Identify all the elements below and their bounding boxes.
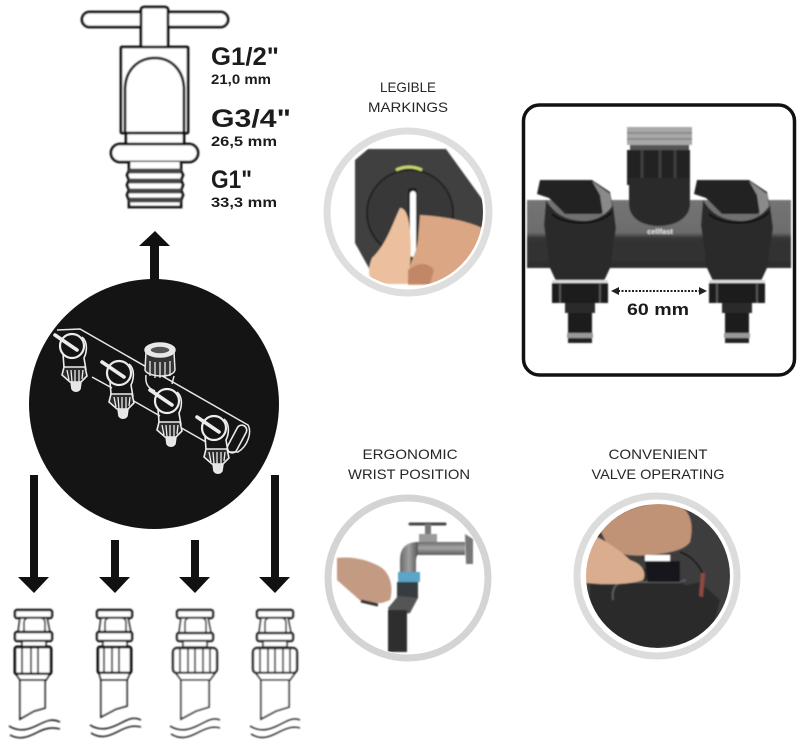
heading: legible markings bbox=[368, 79, 448, 115]
horizontal pipe bbox=[527, 200, 791, 268]
heading: ergonomic wrist position bbox=[348, 446, 470, 482]
hose connector 4 bbox=[250, 610, 300, 738]
four outlet valves bbox=[55, 334, 87, 391]
pipe size labels: G1" bbox=[211, 166, 252, 194]
heading: convenient valve operating bbox=[592, 446, 724, 482]
arrow: up to tap bbox=[139, 231, 170, 282]
panel: 60 mm spacing photo bbox=[524, 105, 794, 375]
manifold body outline bbox=[57, 329, 250, 452]
pipe size labels: 21,0 mm bbox=[211, 71, 271, 87]
pipe size labels: G1/2" bbox=[211, 43, 279, 71]
heading: ergonomic wrist position: WRIST POSITION bbox=[348, 466, 470, 482]
pipe size labels: 26,5 mm bbox=[211, 133, 277, 149]
heading: ergonomic wrist position: ERGONOMIC bbox=[362, 446, 458, 462]
heading: legible markings: LEGIBLE bbox=[380, 79, 436, 95]
black circle with manifold line drawing bbox=[29, 279, 279, 529]
right valve bbox=[694, 180, 770, 214]
circle photo: convenient valve operating bbox=[577, 496, 737, 656]
pipe size labels bbox=[211, 43, 291, 210]
dimension label: 60 mm bbox=[627, 300, 689, 319]
hose connector 2 bbox=[90, 610, 141, 737]
icon: tap outline with thread bbox=[82, 7, 228, 207]
hose connector 1 bbox=[9, 610, 60, 738]
heading: convenient valve operating: CONVENIENT bbox=[608, 446, 708, 462]
circle photo: ergonomic wrist position bbox=[328, 498, 488, 658]
manifold end cap bbox=[226, 423, 248, 455]
pipe size labels: G3/4" bbox=[211, 105, 291, 133]
dimension arrow bbox=[611, 287, 707, 295]
top inlet nut bbox=[145, 343, 175, 391]
arrows: down to connectors bbox=[18, 475, 290, 593]
circle photo: legible markings bbox=[327, 131, 489, 293]
hose connector 3 bbox=[170, 610, 220, 738]
heading: convenient valve operating: VALVE OPERATING bbox=[592, 466, 724, 482]
top inlet bbox=[627, 127, 692, 145]
left valve bbox=[537, 180, 613, 214]
brand mark: cellfast bbox=[647, 227, 673, 236]
heading: legible markings: MARKINGS bbox=[368, 99, 448, 115]
pipe size labels: 33,3 mm bbox=[211, 194, 277, 210]
